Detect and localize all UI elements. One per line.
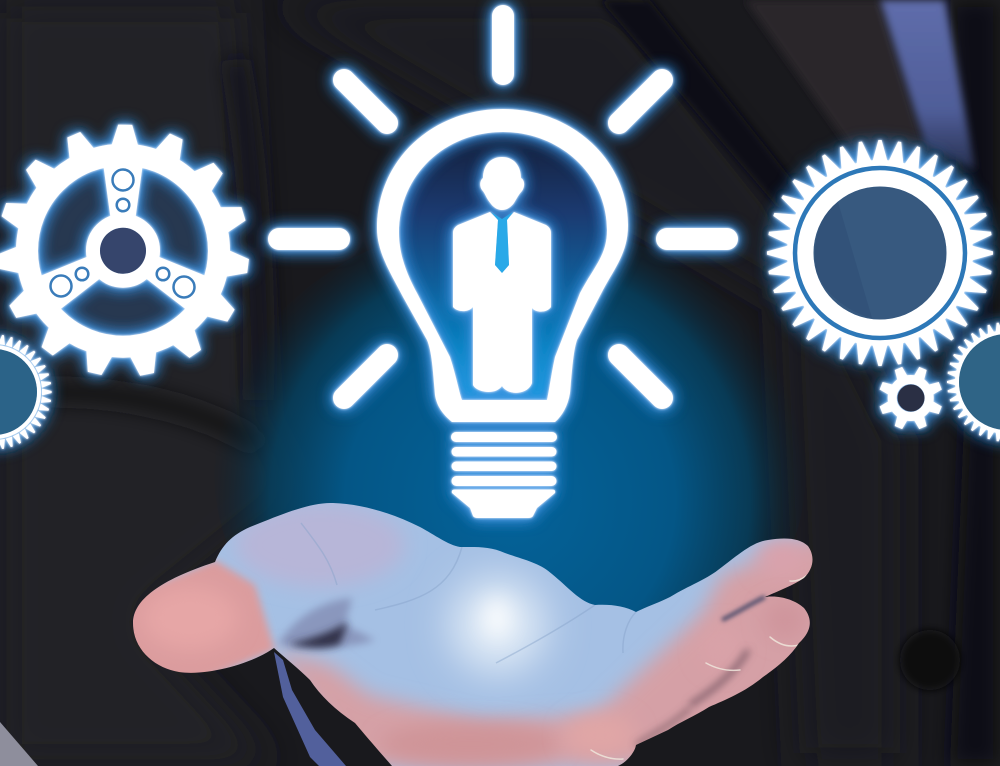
right dark side <box>950 0 1000 766</box>
right edge gear <box>947 322 1000 442</box>
businessman <box>453 157 551 393</box>
glowing icons <box>0 16 1000 518</box>
bulb interior <box>399 132 607 400</box>
palm highlight <box>450 577 546 673</box>
finger nails <box>591 576 806 759</box>
blue light glow behind bulb <box>214 220 806 720</box>
small gear <box>879 366 943 430</box>
sleeve corner <box>0 722 38 766</box>
bottom pink tone <box>274 530 830 766</box>
open hand <box>120 490 830 766</box>
rays <box>279 16 727 398</box>
shirt <box>880 0 975 170</box>
thumb <box>133 558 278 673</box>
left edge gear <box>0 334 52 450</box>
right large gear <box>767 140 993 366</box>
gear discs and details <box>0 168 1000 435</box>
palm creases <box>301 523 636 663</box>
tie <box>491 212 513 273</box>
finger shadows <box>690 650 748 705</box>
left gear <box>0 124 250 377</box>
button <box>900 630 960 690</box>
lapel <box>748 0 921 148</box>
thenar tone <box>235 503 405 587</box>
shirt cuff <box>274 652 346 766</box>
spoke holes <box>50 170 194 298</box>
thumb crease shadow <box>278 598 375 648</box>
light bulb <box>377 109 628 422</box>
screw base <box>451 432 557 442</box>
finger tones <box>750 538 803 566</box>
left gear interior tint <box>35 163 211 339</box>
